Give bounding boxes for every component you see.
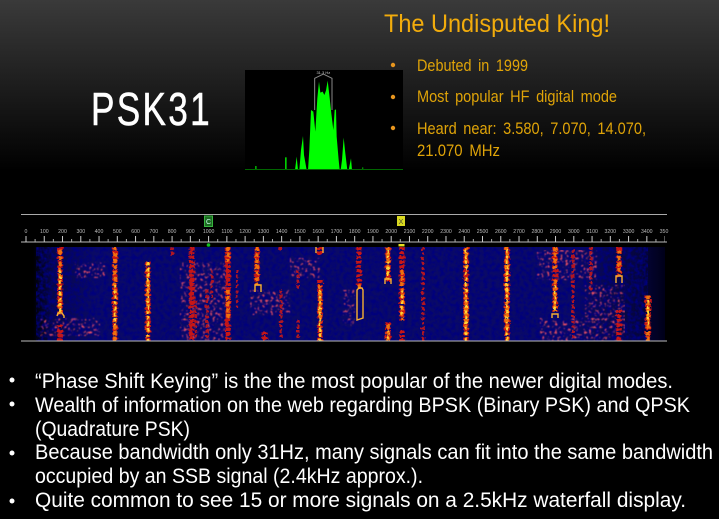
frequency ruler: 3000 xyxy=(568,229,580,235)
marker: green cursor xyxy=(204,216,212,247)
frequency ruler xyxy=(21,214,668,242)
list: PSK31 description: “Phase Shift Keying” is the the most popular of the newer digital modes. xyxy=(35,370,673,393)
list: PSK31 facts xyxy=(391,56,646,160)
frequency ruler: 2300 xyxy=(440,229,452,235)
frequency ruler: 700 xyxy=(149,229,158,235)
list: PSK31 facts: 21.070 MHz xyxy=(417,141,500,160)
frequency ruler: 400 xyxy=(95,229,103,235)
frequency ruler: 1000 xyxy=(203,229,214,235)
frequency ruler: 2500 xyxy=(477,229,488,235)
frequency ruler: 1900 xyxy=(367,229,379,235)
list: PSK31 facts: Most popular HF digital mode xyxy=(417,87,617,106)
frequency ruler: 2600 xyxy=(495,229,507,235)
faint signals xyxy=(172,247,591,340)
frequency ruler: 500 xyxy=(113,229,122,235)
heading: The Undisputed King!: The Undisputed King! xyxy=(384,10,610,38)
frequency ruler: 3200 xyxy=(605,229,616,235)
frequency ruler: 600 xyxy=(131,229,140,235)
frequency ruler: 1400 xyxy=(276,229,287,235)
frequency ruler: 3100 xyxy=(586,229,598,235)
marker: green cursor: C xyxy=(206,219,211,226)
frequency ruler: 3400 xyxy=(641,229,653,235)
frequency ruler: 0 xyxy=(25,229,28,235)
frequency ruler: 1600 xyxy=(312,229,324,235)
frequency ruler: 300 xyxy=(76,229,85,235)
frequency ruler: 200 xyxy=(58,229,67,235)
frequency ruler: 1700 xyxy=(331,229,342,235)
heading: PSK31: PSK31 xyxy=(91,83,212,135)
frequency ruler: 2100 xyxy=(404,229,415,235)
list: PSK31 description: (Quadrature PSK) xyxy=(35,418,190,441)
frequency ruler: 800 xyxy=(168,229,177,235)
signal onset brackets xyxy=(57,247,622,320)
frequency ruler: 1300 xyxy=(258,229,269,235)
frequency ruler: 2000 xyxy=(385,229,397,235)
frequency ruler: 2800 xyxy=(532,229,543,235)
marker: yellow cursor: X xyxy=(399,219,404,226)
list: PSK31 description: Quite common to see 15 or more signals on a 2.5kHz waterfall display. xyxy=(35,489,686,512)
frequency ruler: 3300 xyxy=(623,229,634,235)
frequency ruler: 2200 xyxy=(422,229,434,235)
frequency ruler: 2700 xyxy=(513,229,525,235)
frequency ruler: 900 xyxy=(186,229,195,235)
frequency ruler: 2400 xyxy=(458,229,470,235)
frequency ruler: 1100 xyxy=(221,229,233,235)
frequency ruler: 1800 xyxy=(349,229,361,235)
strong signals xyxy=(60,247,648,341)
noise patches xyxy=(40,250,625,341)
waterfall display xyxy=(21,214,668,341)
list: PSK31 description xyxy=(10,370,713,512)
chart: PSK31 spectrum xyxy=(245,70,403,170)
marker: yellow cursor xyxy=(397,216,405,246)
frequency ruler: 100 xyxy=(40,229,49,235)
frequency ruler: 1200 xyxy=(239,229,251,235)
frequency ruler: 2900 xyxy=(550,229,561,235)
list: PSK31 facts: Heard near: 3.580, 7.070, 14.070, xyxy=(417,119,646,138)
list: PSK31 description: occupied by an SSB signal (2.4kHz approx.). xyxy=(35,465,423,488)
waterfall spectrogram xyxy=(33,247,665,341)
frequency ruler: 1500 xyxy=(294,229,306,235)
list: PSK31 facts: Debuted in 1999 xyxy=(417,56,528,75)
list: PSK31 description: Wealth of information on the web regarding BPSK (Binary PSK) and QPSK xyxy=(35,394,690,417)
frequency ruler: 350 xyxy=(660,229,668,235)
chart: PSK31 spectrum: 31.3 Hz xyxy=(316,70,330,75)
